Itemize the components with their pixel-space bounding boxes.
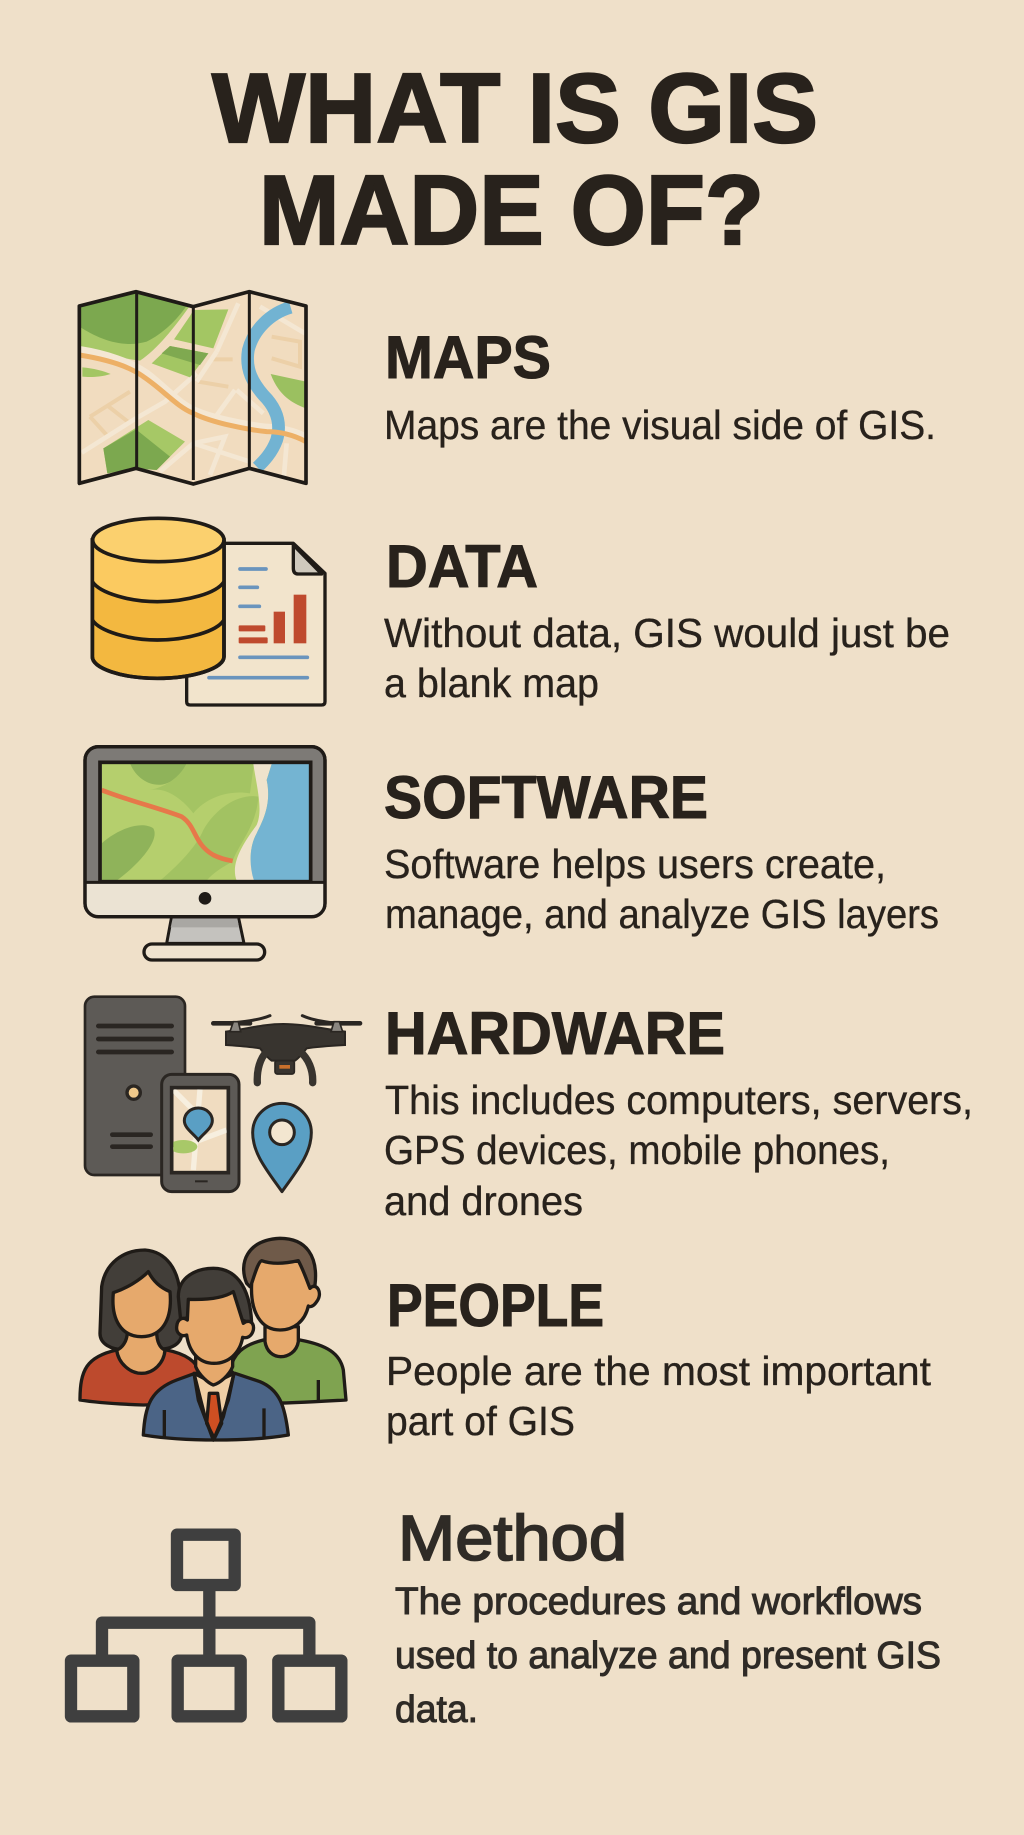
section: software text (384, 764, 939, 937)
man with green shirt (230, 1238, 346, 1403)
section: people text (386, 1272, 932, 1444)
section: software text: manage, and analyze GIS layers (385, 891, 939, 937)
icon: three people (80, 1238, 346, 1440)
section: data text (384, 533, 950, 706)
icon: desktop monitor with map (85, 747, 325, 960)
section: people text: PEOPLE (387, 1272, 604, 1339)
computer tower (85, 997, 185, 1175)
section: method text: Method (398, 1502, 627, 1574)
section: software text: Software helps users create, (384, 841, 886, 887)
section: method text: The procedures and workflows (395, 1581, 922, 1623)
section: hardware text (384, 1000, 973, 1224)
mobile phone (162, 1074, 239, 1192)
section: hardware text: HARDWARE (385, 1000, 725, 1067)
icon: database and document (92, 518, 325, 705)
title: WHAT IS GIS (212, 53, 818, 163)
section: software text: SOFTWARE (384, 764, 708, 831)
icon: hardware group (85, 997, 360, 1192)
man in suit (143, 1268, 288, 1440)
section: data text: DATA (386, 533, 538, 600)
section: method text (395, 1502, 941, 1731)
section: people text: part of GIS (386, 1398, 575, 1444)
section: hardware text: This includes computers, servers, (385, 1077, 973, 1123)
section: hardware text: GPS devices, mobile phones, (384, 1127, 890, 1173)
icon: folded map (77, 290, 310, 487)
section: maps text: MAPS (385, 324, 551, 391)
section: method text: used to analyze and present GIS (395, 1635, 941, 1677)
section: hardware text: and drones (384, 1178, 583, 1224)
woman (80, 1250, 200, 1405)
icon: hierarchy workflow diagram (71, 1535, 341, 1716)
section: maps text: Maps are the visual side of GIS. (384, 402, 936, 448)
section: method text: data. (395, 1689, 478, 1731)
section: data text: a blank map (384, 660, 599, 706)
section: data text: Without data, GIS would just be (384, 610, 950, 656)
section: maps text (384, 324, 936, 448)
drone (213, 1016, 360, 1083)
location pin (253, 1103, 311, 1192)
section: people text: People are the most important (386, 1348, 932, 1394)
title: MADE OF? (259, 155, 764, 265)
title (212, 53, 818, 265)
